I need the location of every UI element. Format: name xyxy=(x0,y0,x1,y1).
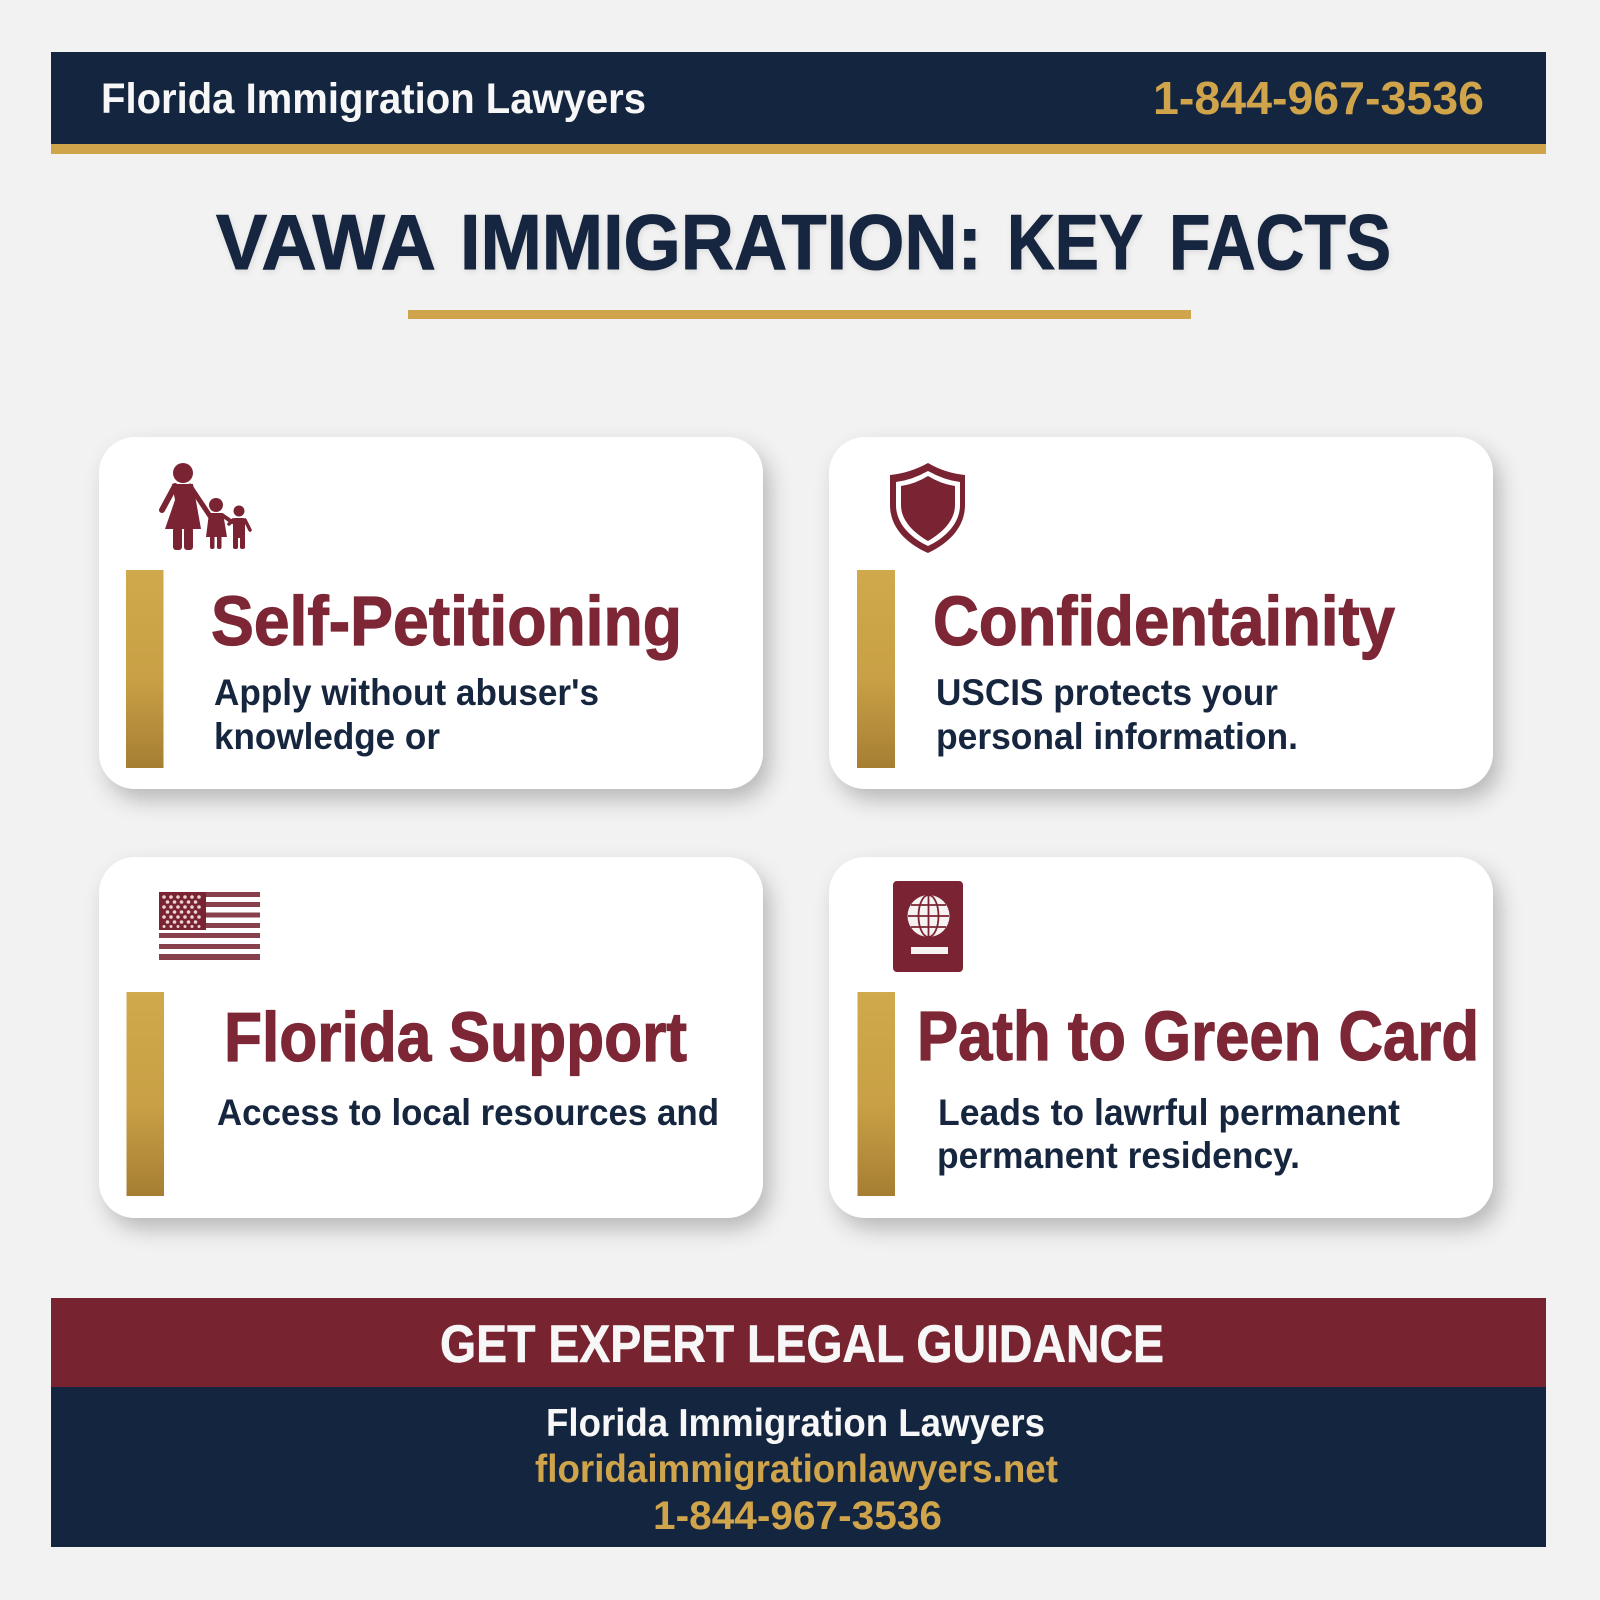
heading: Path to Green Card xyxy=(917,997,1479,1075)
description: USCIS protects your xyxy=(936,672,1278,713)
description: Apply without abuser's xyxy=(214,672,599,713)
title: KEY xyxy=(1007,198,1143,286)
description: personal information. xyxy=(936,716,1298,757)
phone number: 1-844-967-3536 xyxy=(653,1494,942,1538)
description: Access to local resources and xyxy=(217,1092,719,1133)
header bar xyxy=(51,52,1546,154)
description: knowledge or xyxy=(214,716,440,757)
panel: confidentiality xyxy=(829,437,1493,789)
heading: Florida Support xyxy=(224,998,687,1076)
website: floridaimmigrationlawyers.net xyxy=(535,1448,1058,1491)
title: IMMIGRATION: xyxy=(460,198,982,286)
heading: Confidentainity xyxy=(933,582,1395,660)
firm name: Florida Immigration Lawyers xyxy=(546,1402,1045,1445)
description: permanent residency. xyxy=(937,1135,1300,1176)
heading: Self-Petitioning xyxy=(211,582,682,660)
title: VAWA xyxy=(216,198,436,286)
accent bar xyxy=(857,570,895,768)
panel: florida support xyxy=(99,857,763,1218)
header firm name: Florida Immigration Lawyers xyxy=(101,75,646,123)
panel: self-petitioning xyxy=(99,437,763,789)
description xyxy=(937,1092,1400,1176)
icon: passport xyxy=(893,881,963,972)
description xyxy=(214,672,599,757)
icon: shield xyxy=(890,463,965,553)
description: Leads to lawrful permanent xyxy=(938,1092,1400,1133)
accent bar xyxy=(126,992,164,1196)
footer contact panel xyxy=(51,1387,1546,1547)
header phone number: 1-844-967-3536 xyxy=(1153,72,1484,124)
footer banner xyxy=(51,1298,1546,1547)
description xyxy=(936,672,1298,757)
accent bar xyxy=(126,570,164,768)
footer heading: GET EXPERT LEGAL GUIDANCE xyxy=(440,1315,1164,1374)
icon: mother and children xyxy=(162,463,250,550)
accent bar xyxy=(858,992,895,1196)
panel: path to green card xyxy=(829,857,1493,1218)
title xyxy=(216,198,1391,286)
title: FACTS xyxy=(1169,198,1391,286)
icon: american flag xyxy=(159,892,260,960)
